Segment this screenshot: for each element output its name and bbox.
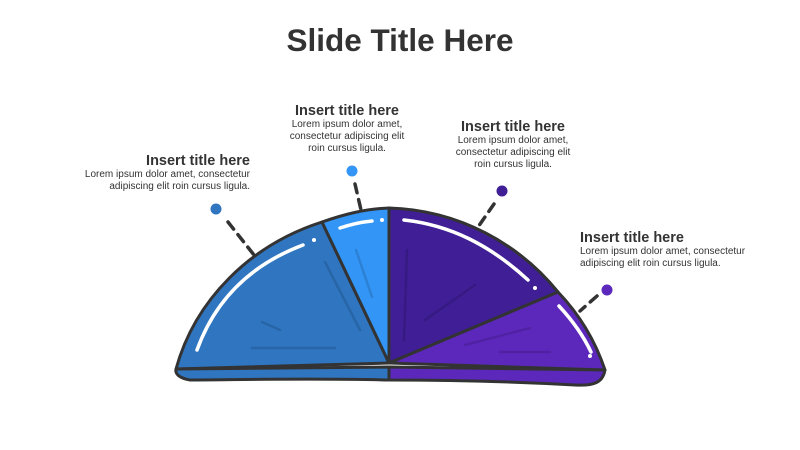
text block 2 bbox=[290, 103, 404, 154]
text block 1 bbox=[85, 153, 250, 192]
text block 1: Lorem ipsum dolor amet, consectetur bbox=[85, 169, 250, 180]
text block 3: Lorem ipsum dolor amet, bbox=[458, 135, 568, 146]
text block 3 bbox=[456, 119, 570, 170]
text block 3: roin cursus ligula. bbox=[474, 159, 552, 170]
text block 4 bbox=[580, 230, 745, 269]
text block 2: consectetur adipiscing elit bbox=[290, 131, 404, 142]
connectors bbox=[228, 184, 597, 311]
text block 2: Lorem ipsum dolor amet, bbox=[292, 119, 402, 130]
segments bbox=[176, 208, 605, 385]
text block 1: Insert title here bbox=[146, 153, 250, 169]
text block 3: Insert title here bbox=[461, 119, 565, 135]
dots bbox=[210, 166, 612, 296]
text block 2: Insert title here bbox=[295, 103, 399, 119]
texture bbox=[252, 250, 550, 352]
text block 4: Lorem ipsum dolor amet, consectetur bbox=[580, 246, 745, 257]
text block 3: consectetur adipiscing elit bbox=[456, 147, 570, 158]
title: Slide Title Here bbox=[286, 22, 514, 58]
text block 4: adipiscing elit roin cursus ligula. bbox=[580, 258, 721, 269]
highlights bbox=[197, 220, 591, 352]
text block 4: Insert title here bbox=[580, 230, 684, 246]
text block 2: roin cursus ligula. bbox=[308, 143, 386, 154]
text block 1: adipiscing elit roin cursus ligula. bbox=[109, 181, 250, 192]
